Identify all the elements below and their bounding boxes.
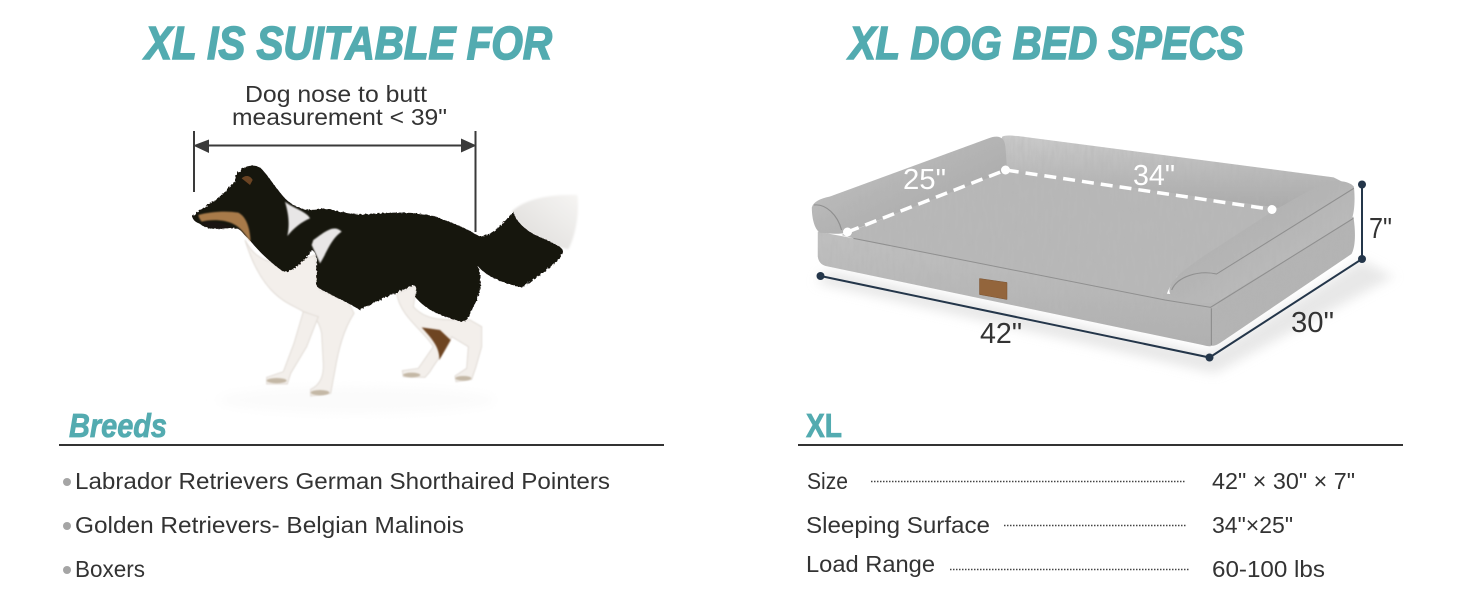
spec row: sleeping surface — [806, 512, 1293, 538]
bed dimension labels: 42" — [980, 318, 1022, 350]
spec row: load range — [806, 551, 1325, 582]
spec row: size: 42" × 30" × 7" — [1212, 468, 1355, 494]
bed back bolster — [1001, 135, 1346, 217]
dog mouth — [202, 222, 233, 229]
spec row: load range: 60-100 lbs — [1212, 556, 1325, 582]
illustration: standing collie dog — [193, 166, 578, 413]
measurement caption — [232, 81, 447, 130]
bed base right face — [1211, 217, 1355, 346]
bed piping seams — [814, 188, 1354, 345]
breeds rule — [59, 444, 664, 446]
panel: breeds heading: Breeds — [69, 407, 167, 444]
specs heading: XL: XL — [806, 407, 842, 444]
bed dimension labels — [903, 160, 1392, 350]
dashed line: sleeping surface dimensions — [843, 166, 1276, 236]
spec row: size — [807, 468, 1355, 494]
list: breeds: Boxers — [75, 556, 145, 582]
dimension lines: bed outer size — [816, 180, 1366, 362]
dog muzzle markings — [198, 212, 251, 242]
dog tan leg patch — [422, 327, 451, 360]
measurement caption: measurement < 39" — [232, 104, 447, 130]
list: breeds: Golden Retrievers- Belgian Malinois — [75, 512, 464, 538]
dog neck white streak — [285, 202, 342, 263]
bed dimension labels: 25" — [903, 164, 946, 196]
heading: XL dog bed specs: XL DOG BED SPECS — [846, 17, 1244, 69]
bed sleeping surface — [842, 170, 1282, 300]
bed right bolster — [1169, 181, 1355, 303]
specs rule — [798, 444, 1403, 446]
spec row: sleeping surface: Sleeping Surface — [806, 512, 990, 538]
bed base front face — [818, 232, 1211, 346]
spec row: size: Size — [807, 468, 848, 494]
arrow: nose to butt measurement — [193, 131, 476, 232]
illustration: grey bolster dog bed — [812, 135, 1393, 373]
dog paws detail — [267, 373, 471, 395]
bed dimension labels: 34" — [1133, 160, 1175, 192]
dog white chest and legs — [245, 240, 482, 396]
bed left bolster — [812, 137, 1007, 234]
bed corner filler — [1163, 293, 1221, 308]
dog ear accent — [242, 176, 253, 185]
heading: XL is suitable for: XL IS SUITABLE FOR — [142, 17, 552, 69]
list: breeds: Labrador Retrievers German Shorthaired Pointers — [75, 468, 610, 494]
spec row: sleeping surface: 34"×25" — [1212, 512, 1293, 538]
bed dimension labels: 7" — [1369, 213, 1392, 245]
bed dimension labels: 30" — [1291, 307, 1334, 339]
bed leather logo patch — [980, 278, 1007, 300]
list: breeds — [63, 468, 610, 582]
measurement caption: Dog nose to butt — [245, 81, 428, 107]
spec row: load range: Load Range — [806, 551, 935, 577]
dog black coat — [193, 166, 563, 322]
bed shadow — [818, 260, 1393, 373]
dog tail tip — [512, 195, 578, 249]
